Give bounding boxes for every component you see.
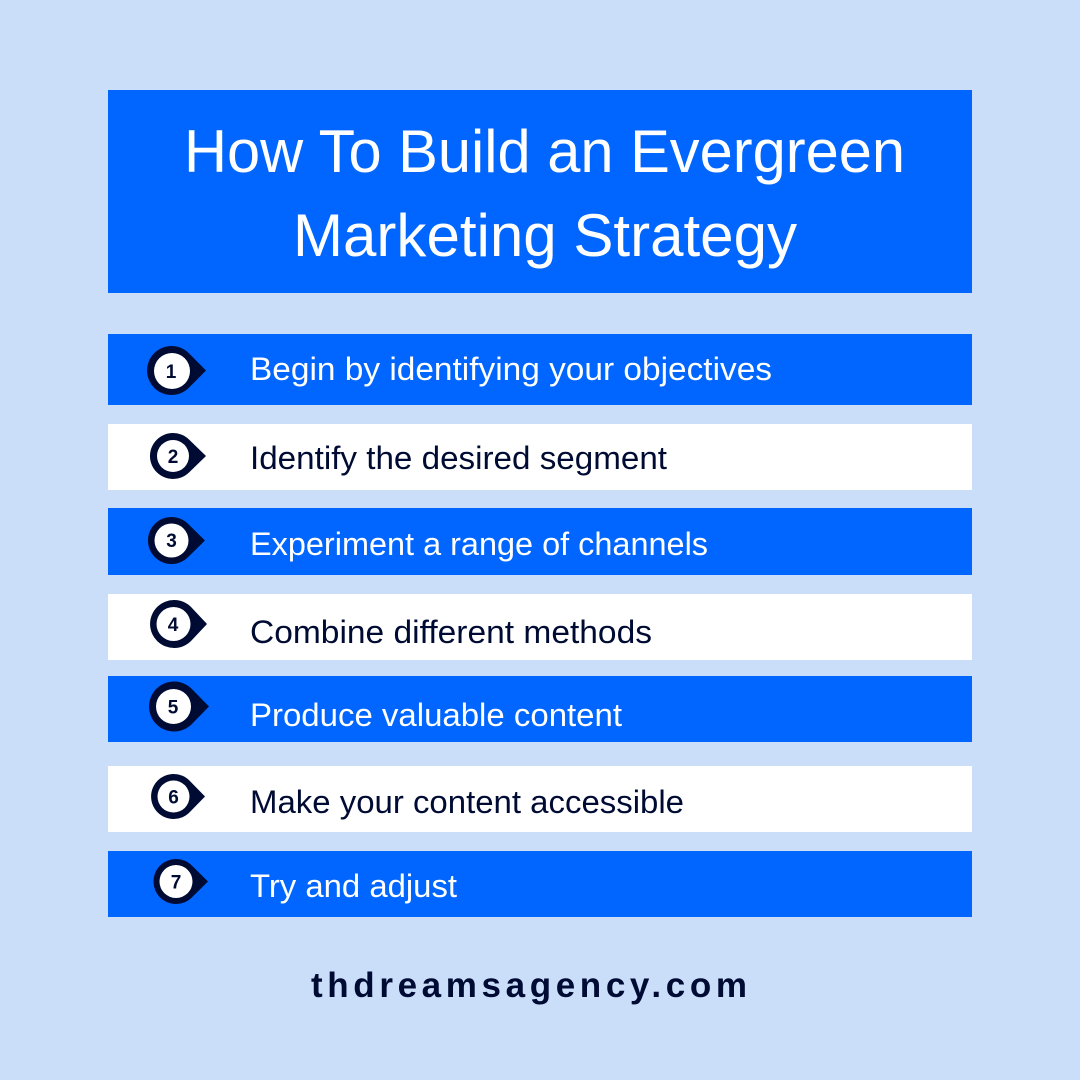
step 7 text: Try and adjust xyxy=(250,868,457,904)
step 3 row xyxy=(108,508,972,575)
icon: number 2 marker xyxy=(150,433,206,479)
step 2 row xyxy=(108,424,972,490)
icon: number 4 marker xyxy=(150,600,207,648)
step 4 row xyxy=(108,594,972,660)
step 4 text: Combine different methods xyxy=(250,614,652,650)
icon: number 1 marker: 1 xyxy=(166,362,177,383)
icon: number 3 marker: 3 xyxy=(166,531,177,552)
icon: number 6 marker: 6 xyxy=(168,788,179,808)
icon: number 2 marker: 2 xyxy=(168,447,178,468)
title line 1: How To Build an Evergreen xyxy=(184,118,905,185)
step 1 row xyxy=(108,334,972,405)
icon: number 1 marker xyxy=(147,346,206,395)
step 3 text: Experiment a range of channels xyxy=(250,526,708,562)
step 6 text: Make your content accessible xyxy=(250,784,684,820)
icon: number 3 marker xyxy=(148,517,205,564)
icon: number 7 marker xyxy=(153,859,208,904)
step 7 row xyxy=(108,851,972,917)
icon: number 6 marker xyxy=(151,774,205,819)
title line 2: Marketing Strategy xyxy=(293,202,797,269)
title banner xyxy=(108,90,972,293)
icon: number 5 marker: 5 xyxy=(168,698,179,718)
step 1 text: Begin by identifying your objectives xyxy=(250,351,772,387)
step 2 text: Identify the desired segment xyxy=(250,440,667,476)
icon: number 5 marker xyxy=(149,681,209,731)
icon: number 4 marker: 4 xyxy=(168,615,179,636)
step 6 row xyxy=(108,766,972,832)
icon: number 7 marker: 7 xyxy=(171,872,181,894)
step 5 text: Produce valuable content xyxy=(250,697,622,733)
footer website: thdreamsagency.com xyxy=(311,966,747,1005)
step 5 row xyxy=(108,676,972,742)
